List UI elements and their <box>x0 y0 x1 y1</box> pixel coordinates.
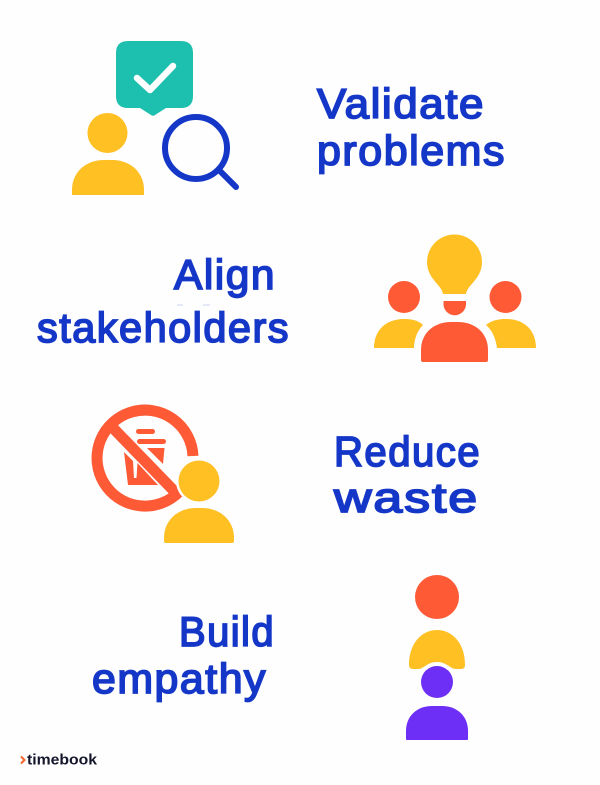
magnifier <box>165 117 236 187</box>
icon: person with check bubble and magnifier <box>72 41 236 195</box>
right team member <box>486 281 536 348</box>
heading: Reduce waste: waste <box>333 474 479 521</box>
prohibition ring <box>97 410 193 506</box>
purple person <box>406 666 468 740</box>
yellow person <box>72 113 144 195</box>
slash <box>113 428 177 494</box>
yellow person <box>164 458 234 543</box>
light bulb <box>427 235 482 294</box>
logo: timebook: timebook <box>27 752 98 768</box>
icon: no waste symbol with person <box>97 410 234 543</box>
heading: Validate problems: Validate <box>317 80 485 127</box>
speech bubble with checkmark <box>116 41 193 116</box>
bulb base <box>444 301 466 315</box>
left team member <box>374 281 423 348</box>
centre team member <box>421 322 488 362</box>
heading: Align stakeholders: Align <box>174 251 276 298</box>
heading: Build empathy <box>92 608 275 702</box>
heading: Align stakeholders: stakeholders <box>37 304 290 351</box>
heading: Align stakeholders <box>37 251 290 351</box>
icon: two people stacked <box>406 575 468 740</box>
heading: Validate problems <box>317 80 506 174</box>
heading: Build empathy: empathy <box>92 655 267 702</box>
icon: team sharing a light bulb <box>374 235 536 362</box>
heading: Validate problems: problems <box>317 127 506 174</box>
heading: Build empathy: Build <box>179 608 275 655</box>
yellow shoulders <box>409 630 465 669</box>
trash can <box>124 429 166 485</box>
heading: Reduce waste <box>333 428 481 521</box>
heading: Reduce waste: Reduce <box>334 428 481 475</box>
orange head <box>415 575 459 619</box>
